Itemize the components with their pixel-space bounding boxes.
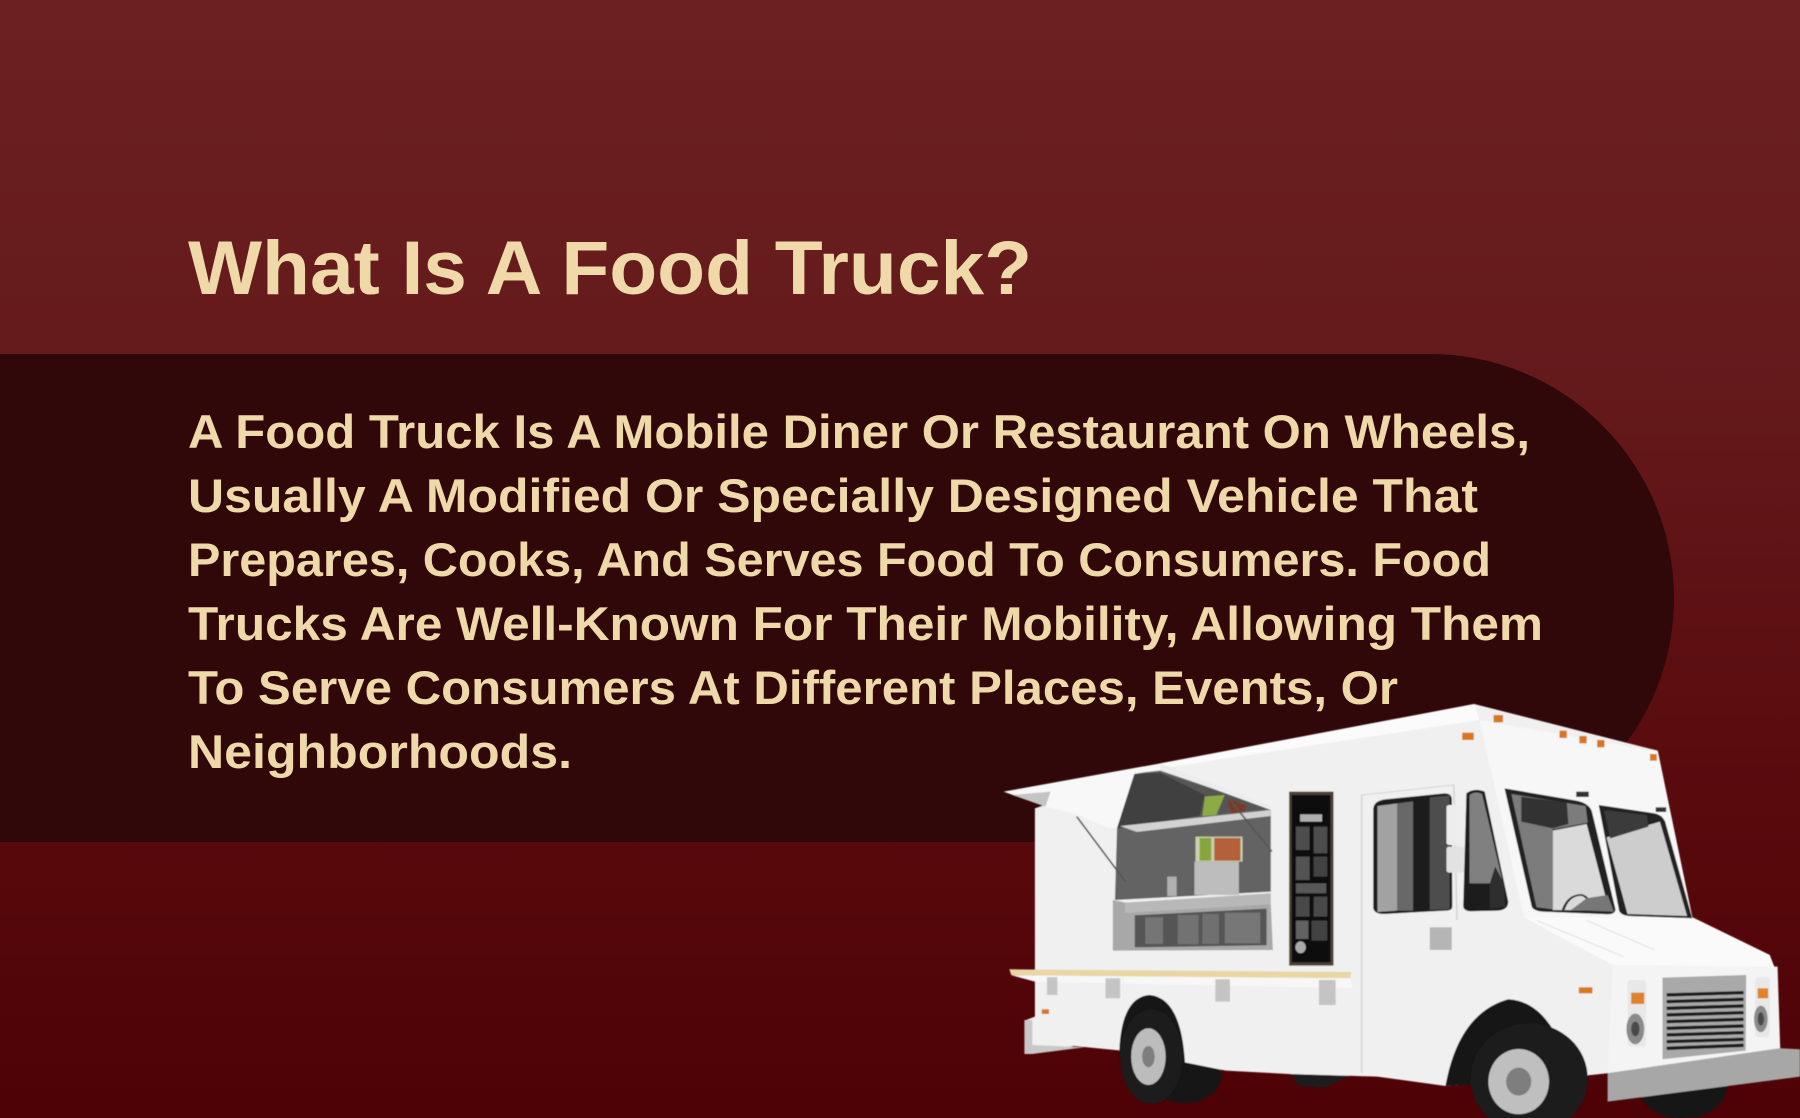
- serving window: [1115, 771, 1271, 913]
- roof marker lights: [1042, 715, 1657, 1014]
- roof rail: [1160, 704, 1479, 767]
- text block: definition: Prepares, Cooks, And Serves Food To Consumers. Food: [188, 533, 1491, 586]
- cab front face: [1479, 720, 1692, 917]
- awning struts: [1077, 795, 1272, 882]
- headlights: [1626, 977, 1770, 1047]
- text block: definition: To Serve Consumers At Different Places, Events, Or: [188, 661, 1398, 714]
- far front tyre: [1639, 1085, 1728, 1118]
- rear inner tyre: [1148, 1047, 1222, 1103]
- door window: [1373, 793, 1452, 914]
- title: What Is A Food Truck?: [188, 226, 1032, 311]
- door outline: [1362, 785, 1457, 1073]
- front wheel arch: [1445, 999, 1572, 1086]
- rear step: [1024, 1020, 1085, 1054]
- side mirrors: [1447, 805, 1464, 873]
- cab lower front: [1608, 965, 1780, 1073]
- rear wheel: [1120, 1009, 1183, 1104]
- text block: definition: Neighborhoods.: [188, 725, 572, 778]
- windshield right: [1599, 805, 1692, 918]
- front wheel: [1471, 1023, 1588, 1118]
- grille: [1663, 975, 1746, 1059]
- windshield left: [1505, 788, 1615, 914]
- rear wheel arch: [1119, 995, 1185, 1063]
- hood crease lines: [1537, 921, 1655, 957]
- truck body: [1024, 704, 1780, 1086]
- menu board: [1289, 792, 1334, 966]
- text block: definition: Usually A Modified Or Specially Designed Vehicle That: [188, 469, 1478, 522]
- awning: [1004, 763, 1272, 828]
- text block: definition: A Food Truck Is A Mobile Diner Or Restaurant On Wheels,: [188, 405, 1530, 458]
- menu panel: [1135, 909, 1267, 947]
- text block: definition: Trucks Are Well-Known For Their Mobility, Allowing Them: [188, 597, 1543, 650]
- counter panel: [1113, 900, 1273, 951]
- door handle plate: [1430, 927, 1452, 950]
- icon: food truck: [1004, 704, 1800, 1118]
- hood: [1524, 917, 1778, 975]
- panel: dark rounded band: [0, 354, 1674, 842]
- truck underside: [1289, 1072, 1359, 1087]
- shelf: [1009, 969, 1352, 1005]
- bumper: [1608, 1048, 1800, 1102]
- text block: definition: [188, 405, 1543, 778]
- cab side window: [1463, 790, 1508, 911]
